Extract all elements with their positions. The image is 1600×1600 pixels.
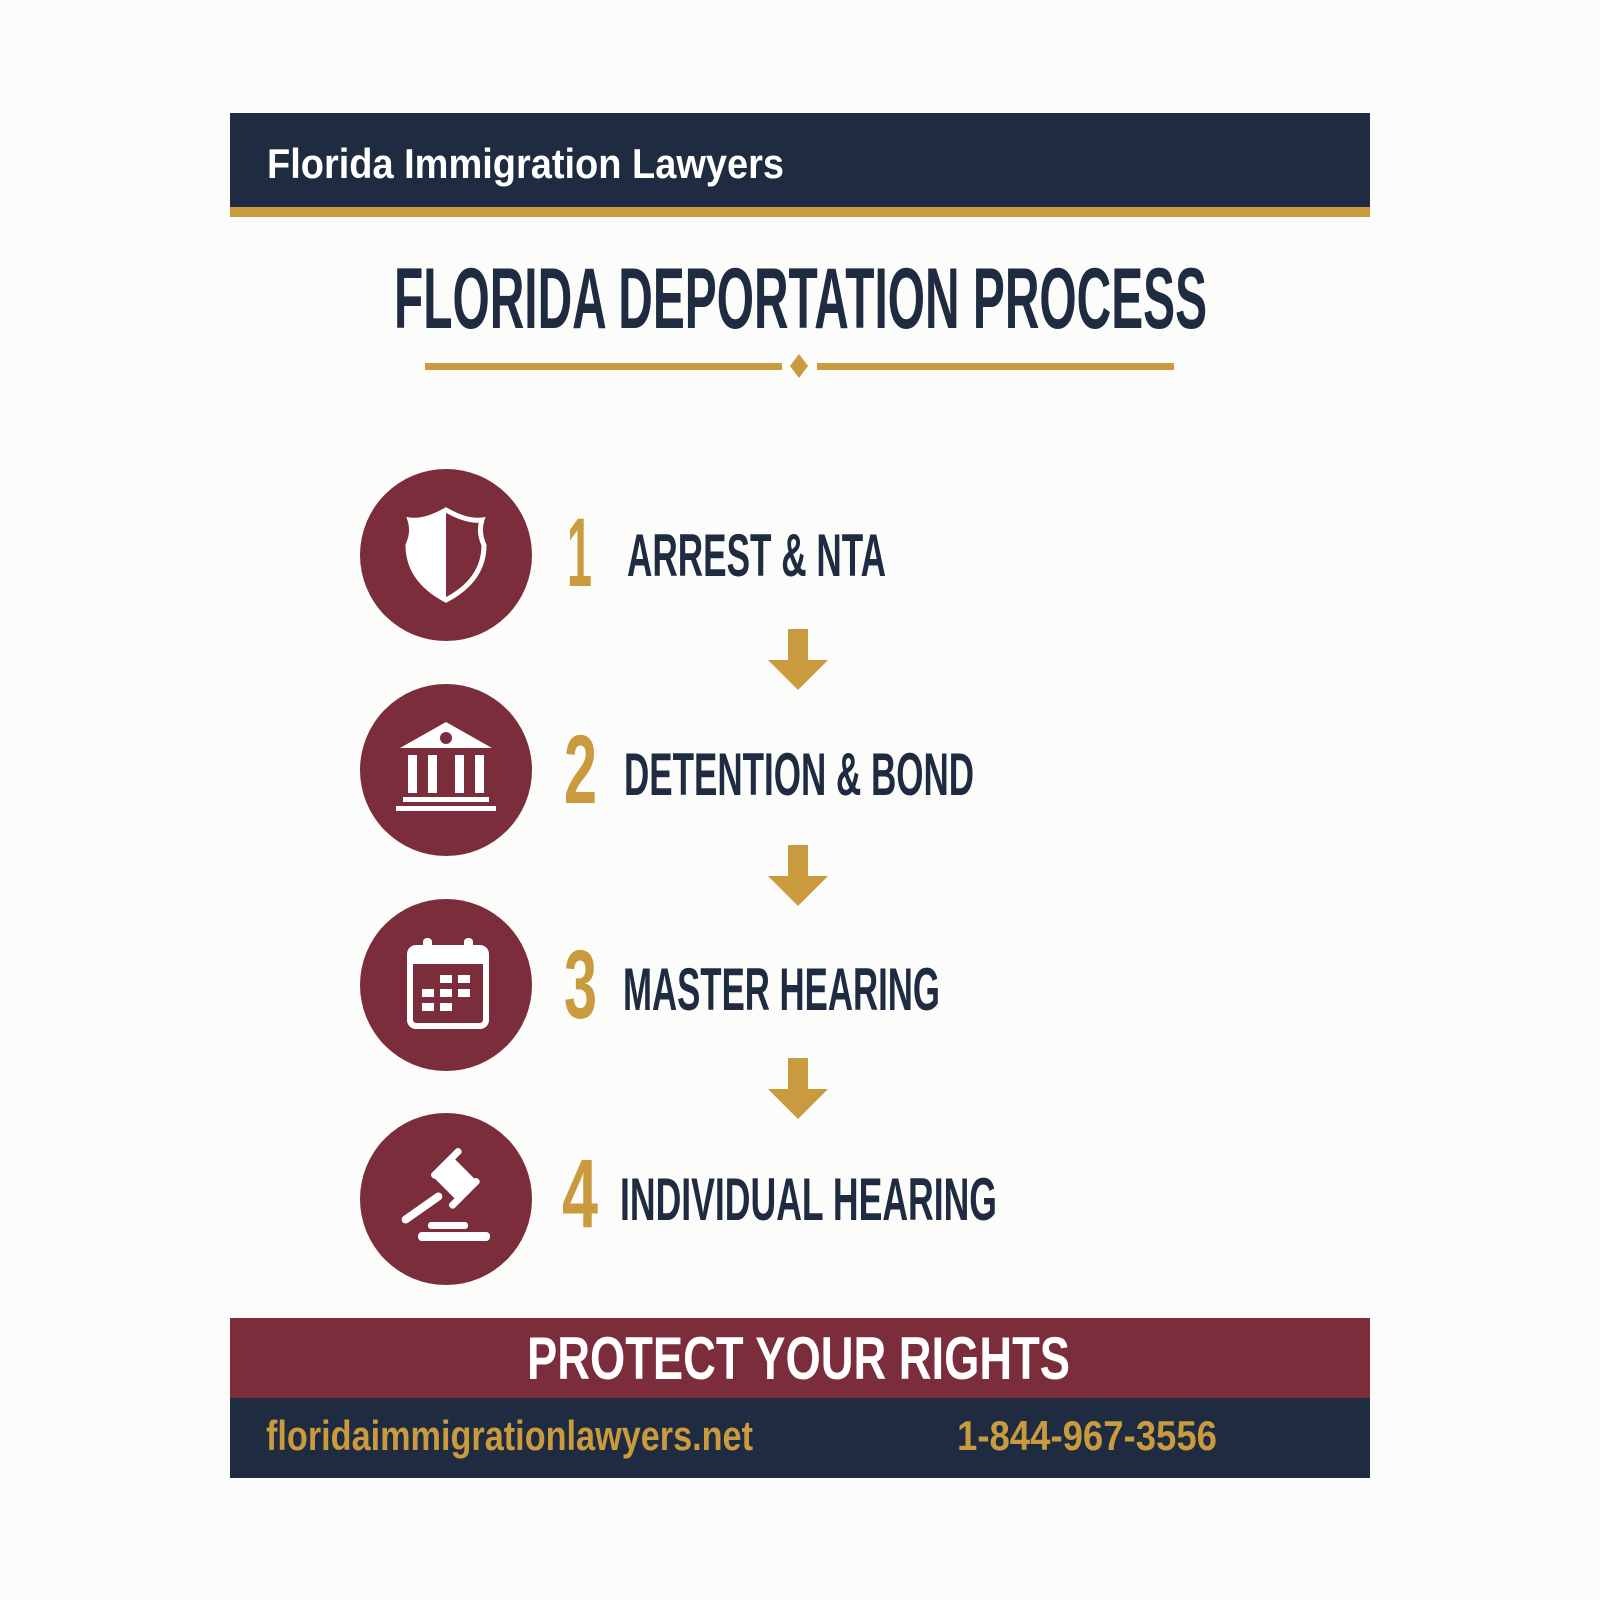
arrow 1 xyxy=(768,629,828,690)
header text: Florida Immigration Lawyers xyxy=(267,140,784,187)
icon: gavel xyxy=(360,1113,532,1285)
step 3 xyxy=(360,899,940,1071)
title divider xyxy=(425,354,1174,378)
icon: courthouse xyxy=(360,684,532,856)
step 1: 1 xyxy=(567,498,592,607)
step 4: 4 xyxy=(562,1139,598,1248)
step 1: ARREST & NTA xyxy=(627,522,886,589)
step 2: 2 xyxy=(564,715,597,824)
footer heading: PROTECT YOUR RIGHTS xyxy=(527,1325,1070,1392)
icon: shield xyxy=(360,469,532,641)
step 1 xyxy=(360,469,886,641)
icon: calendar xyxy=(360,899,532,1071)
arrow 3 xyxy=(768,1058,828,1119)
arrow 2 xyxy=(768,845,828,906)
step 3: 3 xyxy=(564,930,597,1039)
step 4 xyxy=(360,1113,997,1285)
step 2 xyxy=(360,684,974,856)
step 3: MASTER HEARING xyxy=(623,956,940,1023)
footer xyxy=(230,1318,1370,1478)
step 4: INDIVIDUAL HEARING xyxy=(620,1166,997,1233)
step 2: DETENTION & BOND xyxy=(624,741,974,808)
header bar xyxy=(230,113,1370,217)
phone: 1-844-967-3556 xyxy=(957,1412,1217,1459)
website: floridaimmigrationlawyers.net xyxy=(266,1412,753,1459)
